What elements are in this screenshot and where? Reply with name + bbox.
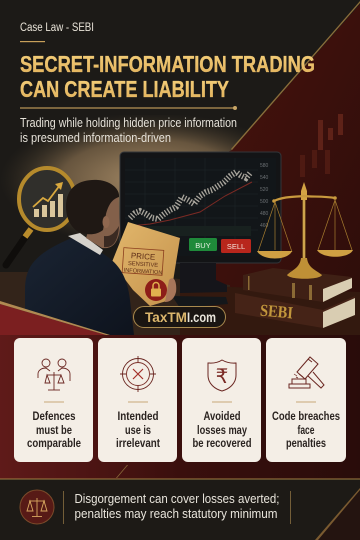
books bbox=[235, 268, 355, 328]
panel: avoided losses card: Avoided bbox=[204, 411, 240, 423]
panel: avoided losses card: losses may bbox=[197, 425, 247, 437]
panel: avoided losses card bbox=[182, 338, 261, 462]
axis labels: 480 bbox=[260, 211, 269, 217]
title bbox=[20, 51, 315, 102]
panel: defences card bbox=[14, 338, 93, 462]
volume bars bbox=[126, 226, 251, 236]
logo pill: TaxTM bbox=[145, 309, 187, 325]
panel: code breaches card: face bbox=[298, 425, 314, 437]
panel: intended use card: irrelevant bbox=[116, 438, 160, 450]
footer text: penalties may reach statutory minimum bbox=[74, 507, 278, 521]
buy button bbox=[189, 238, 217, 251]
maroon lower band bbox=[0, 301, 360, 479]
kicker: Case Law - SEBI bbox=[20, 22, 94, 34]
logo pill bbox=[134, 306, 226, 328]
hero illustration bbox=[6, 152, 360, 340]
footer band bbox=[0, 465, 360, 540]
panel: intended use card: Intended bbox=[118, 411, 158, 423]
buy button: BUY bbox=[195, 241, 211, 250]
icon: rupee shield: ₹ bbox=[216, 366, 228, 388]
scales of justice bbox=[257, 182, 353, 279]
footer text: Disgorgement can cover losses averted; bbox=[74, 492, 280, 506]
panel: defences card: comparable bbox=[27, 438, 81, 450]
panel: intended use card: use is bbox=[125, 425, 151, 437]
person bbox=[25, 180, 134, 335]
footer text bbox=[74, 492, 280, 521]
document folder: PRICE bbox=[131, 251, 156, 262]
panel: defences card: Defences bbox=[32, 411, 76, 423]
axis labels: 520 bbox=[260, 187, 269, 193]
desk bbox=[180, 285, 360, 340]
icon: footer scales badge bbox=[20, 490, 54, 524]
axis labels: 460 bbox=[260, 223, 269, 229]
icon: magnifying glass with rising chart bbox=[6, 168, 75, 265]
logo pill: I.com bbox=[187, 309, 216, 325]
subtitle bbox=[20, 116, 237, 145]
books: SEBI bbox=[259, 301, 294, 322]
document folder: SENSITIVE bbox=[128, 261, 158, 269]
price candles bbox=[130, 172, 251, 219]
icon: padlock on folder bbox=[145, 278, 176, 302]
axis labels: 500 bbox=[260, 199, 269, 205]
axis labels bbox=[260, 163, 269, 229]
sell button: SELL bbox=[227, 242, 245, 251]
sell button bbox=[221, 239, 251, 253]
icon: target with cross bbox=[120, 356, 156, 392]
document folder: INFORMATION bbox=[123, 268, 163, 276]
faint background candlesticks bbox=[300, 114, 343, 177]
axis labels: 540 bbox=[260, 175, 269, 181]
panel: code breaches card: penalties bbox=[286, 438, 326, 450]
panel: code breaches card: Code breaches bbox=[272, 411, 340, 423]
document folder bbox=[112, 222, 180, 306]
icon: gavel bbox=[289, 357, 324, 388]
panel: code breaches card bbox=[266, 338, 346, 462]
panel: intended use card bbox=[98, 338, 177, 462]
subtitle: Trading while holding hidden price information bbox=[20, 116, 237, 130]
subtitle: is presumed information-driven bbox=[20, 131, 171, 145]
title rule bbox=[20, 106, 237, 110]
panel: defences card: must be bbox=[36, 425, 72, 437]
icon: people and scales bbox=[38, 359, 70, 390]
axis labels: 580 bbox=[260, 163, 269, 169]
trading monitor bbox=[120, 152, 281, 308]
panel: avoided losses card: be recovered bbox=[192, 438, 252, 450]
title: CAN CREATE LIABILITY bbox=[20, 76, 229, 102]
